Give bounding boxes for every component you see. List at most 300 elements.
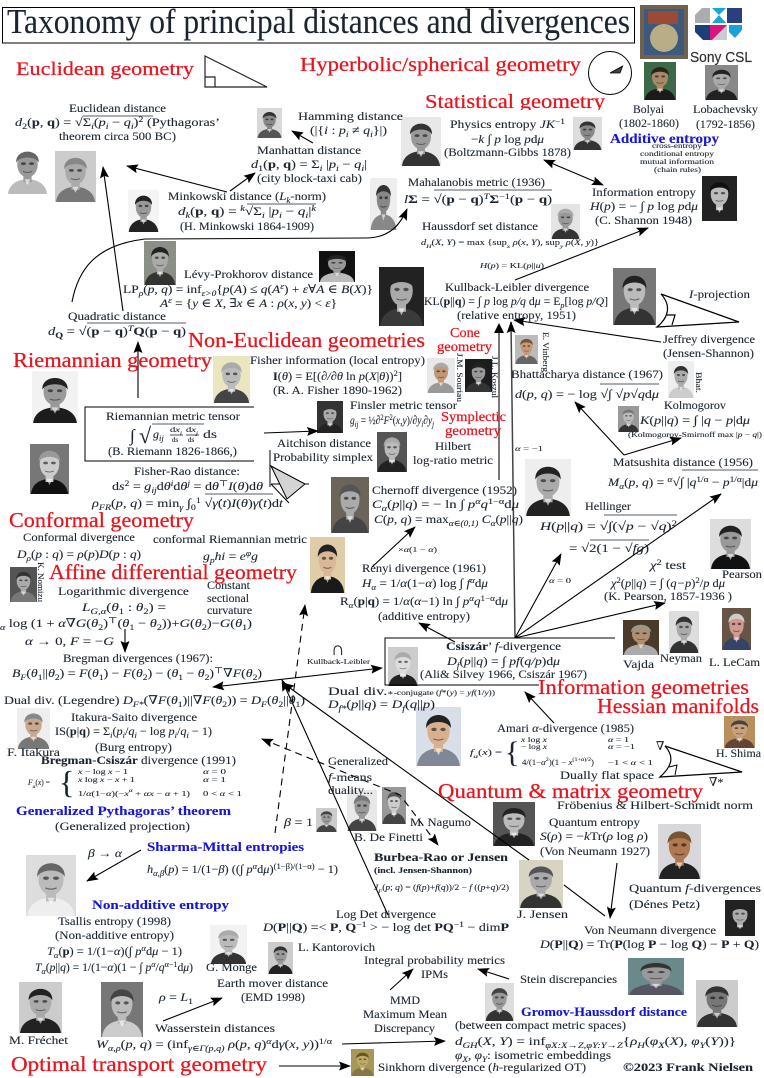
arrow: MMD to IPM — [390, 969, 413, 990]
text: L. LeCam: L. LeCam — [709, 655, 761, 669]
text: Jeffrey divergence — [663, 332, 755, 360]
text: Additive entropy notes: mutual information — [640, 158, 715, 166]
text: Minkowski distance: dk(p, q) = k√Σ i |pi − qi|k — [178, 204, 316, 220]
portrait: Finsler — [317, 401, 343, 433]
text: Log Det divergence: Log Det divergence — [336, 907, 436, 921]
text: rotated Bhat.: Bhat. — [694, 372, 703, 393]
icon: dually flat triangle — [656, 739, 742, 789]
heading: Cone geometry: Cone — [450, 326, 480, 341]
text: Fisher information: (R. A. Fisher 1890-1962) — [273, 383, 402, 397]
portrait: Villani — [101, 982, 143, 1037]
text: Integral probability metrics: Integral probability metrics — [364, 953, 505, 967]
text: L. Kantorovich: L. Kantorovich — [298, 940, 375, 954]
text: Jeffrey divergence: (Jensen-Shannon) — [663, 346, 754, 360]
text: Information entropy: (C. Shannon 1948) — [595, 213, 692, 227]
arrow: Log divergence to Bregman — [124, 629, 126, 652]
text: Bregman divergences: BF(θ1||θ2) = F(θ1) − F(θ2) − ( θ1 − θ2)⊤∇F(θ2) — [12, 666, 262, 682]
text: Fisher-Rao distance: ds2 = gijdθidθj = d θ⊤I(θ)dθ — [112, 479, 263, 494]
text: Burbea-Rao or Jensen: Burbea-Rao or Jensen — [374, 850, 508, 864]
text: Tsallis entropy: (Non-additive entropy) — [55, 928, 174, 942]
text: Riemannian metric tensor: ds — [172, 436, 178, 444]
text: Burbea-Rao or Jensen — [374, 850, 509, 894]
text: Conformal Riemannian metric: conformal Riemannian metric — [153, 532, 307, 546]
text: alpha minus one label: α = −1 — [515, 445, 544, 453]
text: Chernoff divergence: Chernoff divergence (1952) — [372, 483, 517, 497]
heading: Riemannian geometry: Riemannian geometry — [13, 348, 213, 372]
text: Riemannian metric tensor: gij — [153, 427, 164, 442]
portrait: LeCam — [722, 608, 751, 650]
text: chi-square test: (K. Pearson, 1857-1936 ) — [604, 589, 732, 603]
text: Finsler metric tensor: gij = ½∂2F2(x,y)/∂yi∂yj — [350, 413, 435, 428]
panel: Csiszar box — [385, 638, 615, 685]
icon: dually flat triangle: ∇* — [709, 775, 723, 789]
text: Fisher-Rao distance: Fisher-Rao distance: — [134, 464, 240, 478]
text: Bregman-Csiszar divergence: α = 0 — [203, 768, 227, 776]
portrait: Csiszar — [388, 647, 418, 686]
text: Minkowski distance: (H. Minkowski 1864-1909) — [180, 219, 314, 233]
text: Earth mover distance — [217, 976, 328, 1004]
text: Renyi divergence: Hα = 1/α(1−α) log ∫ fαdμ — [361, 576, 488, 592]
text: Fisher information: Fisher information (local entropy) — [250, 353, 425, 367]
portrait: Fisher — [213, 356, 250, 403]
text: Pearson name: Pearson — [722, 567, 762, 581]
text: Euclidean distance: theorem circa 500 BC) — [59, 129, 176, 143]
text: I-projection: I-projection — [688, 287, 750, 301]
arrow: Quadratic to Euclidean — [103, 167, 123, 311]
text: Logarithmic divergence: α → 0, F = − G — [25, 634, 114, 648]
portrait: Jensen — [519, 860, 563, 908]
text: Quantum entropy: Quantum entropy — [549, 815, 640, 829]
text: Bregman-Csiszar divergence: Bregman-Csiszár divergence (1991) — [41, 753, 236, 767]
text: Kullback-Leibler intersection: ∩ — [331, 639, 345, 660]
arrow: Manhattan to Hamming — [292, 131, 313, 143]
portrait: Chernoff — [331, 477, 369, 533]
text: Kullback-Leibler divergence: KL(p||q) = ∫ p log p/q dμ = Ep[log p/Q] — [424, 294, 608, 310]
text: Fisher-Rao distance: ρFR(p, q) = min γ ∫01 √γ̇(t)I(θ)γ̇(t)dt — [91, 496, 284, 512]
heading: Statistical geometry: Statistical geometry — [425, 91, 605, 113]
text: M. Nagumo: M. Nagumo — [410, 815, 471, 829]
text: Riemannian metric tensor: (B. Riemann 1826-1866,) — [108, 444, 237, 458]
icon: probability simplex — [270, 450, 309, 503]
text: Bregman-Csiszar divergence: α = 1 — [203, 776, 227, 784]
arrow: Csiszar to Renyi — [419, 623, 455, 642]
text: Burbea-Rao or Jensen: JF(p; q) = ( f(p)+f(q))/2 − f ((p+q)/2) — [374, 883, 509, 894]
text: Hellinger: H(p||q) = √∫(√ p − √ q)2 — [539, 519, 677, 533]
arrow: Csiszar to Hellinger — [515, 554, 561, 638]
text: Kullback-Leibler divergence: (relative entropy, 1951) — [457, 308, 576, 322]
portrait: Von Neumann small — [725, 900, 755, 936]
text: Constant sectional curvature: sectional — [207, 591, 250, 605]
heading: Information geometries: Information geometries — [538, 675, 749, 699]
text: Csiszar f-divergence: (Ali& Silvey 1966, Csiszár 1967) — [420, 667, 587, 681]
text: Itakura-Saito divergence: IS(p|q) = Σi(pi/qi − log pi/qi − 1) — [55, 724, 212, 740]
text: Minkowski distance: Minkowski distance ( Lk-norm) — [168, 189, 326, 204]
text: Gromov-Hausdorff details: (between compact metric spaces) — [455, 1018, 626, 1032]
heading: Additive entropy: Additive entropy — [610, 132, 719, 147]
portrait: Itakura — [17, 708, 50, 749]
text: Hellinger — [539, 499, 677, 555]
text: Additive entropy notes: (chain rules) — [654, 166, 702, 174]
heading: Affine differential geometry: Affine differential geometry — [49, 560, 298, 584]
arrow: Sharma-Mittal to Tsallis — [87, 850, 141, 881]
text: Tsallis entropy: Tsallis entropy (1998) — [58, 914, 171, 928]
portrait: Frechet — [19, 982, 62, 1033]
portrait: Prokhorov — [319, 251, 355, 282]
text: Amari alpha-divergence: 4/(1−α2)(1 − x(1+α)/2) — [522, 756, 594, 767]
heading: Generalized Pythagoras theorem: Generalized Pythagoras’ theorem — [16, 803, 231, 818]
text: Renyi divergence — [340, 561, 508, 623]
text: Quantum entropy — [540, 815, 650, 858]
text: Generalized f-means duality: Generalized — [328, 754, 388, 768]
text: Conformal divergence: Conformal divergence — [23, 530, 135, 544]
text: Bregman-Csiszar divergence: 1/ α (1− α )(− x α + αx − α + 1) — [78, 789, 191, 798]
panel: Riemannian box — [85, 407, 254, 461]
portrait: Leibler — [613, 268, 656, 325]
portrait: Mahalanobis — [370, 178, 397, 230]
text: Wasserstein distances: Wasserstein distances — [155, 1021, 275, 1035]
portrait: Koszul — [465, 359, 492, 392]
icon: illuminated manuscript — [640, 5, 688, 59]
text: Dual divergence conjugate: Df*(p||q) = Df(q||p) — [327, 697, 435, 712]
arrow: dashed beta to Renyi — [275, 605, 305, 833]
text: Fisher information: I(θ) = E[(∂/∂θ ln p(X|θ))2] — [273, 369, 402, 383]
icon: I-projection — [657, 294, 739, 327]
portrait: Shannon — [702, 176, 737, 221]
portrait: Sinkhorn — [351, 1049, 374, 1076]
text: Sharma-Mittal formula: hα,β(p) = 1/(1−β) ((∫ pαdμ)(1−β)/(1−α) − 1) — [147, 862, 338, 878]
portrait: Levy — [144, 241, 176, 285]
text: G. Monge: G. Monge — [206, 960, 257, 974]
text: Levy-Prokhorov distance — [123, 267, 373, 310]
text: Quantum f-divergences — [629, 881, 761, 911]
text: Gromov-Hausdorff details — [455, 1018, 736, 1064]
text: Fisher-Rao distance — [91, 464, 284, 512]
text: Amari alpha-divergence: { — [505, 736, 519, 769]
portrait: Hilbert — [377, 432, 407, 472]
text: Bolyai: Bolyai — [633, 102, 665, 116]
text: Bregman-Csiszar divergence: x − log x − 1 — [77, 768, 129, 776]
text: Mahalanobis metric: Mahalanobis metric (1936) — [408, 175, 545, 189]
text: Integral probability metrics: IPMs — [421, 967, 448, 981]
text: Amari alpha-divergence: Amari α-divergence (1985) — [497, 721, 634, 735]
text: Tsallis entropy: Tα(p) = 1/(1−α)(∫ pαdμ − 1) — [47, 944, 182, 960]
text: Kullback-Leibler divergence: Kullback-Leibler divergence — [445, 280, 589, 294]
portrait: Nomizu — [10, 567, 37, 602]
text: Burbea-Rao or Jensen: (incl. Jensen-Shannon) — [374, 866, 472, 875]
text: Additive entropy notes: conditional entropy — [640, 150, 715, 158]
heading: Sharma-Mittal entropies: Sharma-Mittal entropies — [147, 839, 304, 854]
portrait: Hausdorff — [551, 204, 580, 239]
text: Manhattan distance: Manhattan distance — [257, 143, 361, 157]
text: Generalized f-means duality — [328, 754, 388, 797]
text: Von Neumann divergence — [539, 923, 759, 951]
text: Kullback-Leibler intersection: Kullback-Leibler — [307, 658, 371, 666]
text: Riemannian metric tensor: Riemannian metric tensor — [106, 409, 240, 423]
arrow: Bregman and Csiszar intersection — [213, 668, 382, 687]
text: Bregman divergences: Bregman divergences (1967): — [63, 651, 213, 665]
text: MMD — [363, 993, 447, 1035]
portrait: Kantorovich — [268, 942, 293, 974]
text: Hilbert log-ratio metric — [413, 439, 493, 467]
arrow: Riemannian to Quadratic — [137, 342, 139, 398]
heading: Cone geometry — [437, 326, 492, 355]
text: Amari alpha-divergence: x log x — [520, 736, 548, 744]
text: MMD: Discrepancy — [374, 1021, 435, 1035]
heading: Non-Euclidean geometries: Non-Euclidean geometries — [188, 328, 425, 352]
text: Itakura-Saito divergence: Itakura-Saito divergence — [71, 710, 197, 724]
text: F. Itakura: F. Itakura — [7, 745, 61, 759]
text: Conformal Riemannian metric — [153, 532, 307, 564]
icon: hyperbolic disk — [588, 52, 632, 94]
text: Quantum entropy: (Von Neumann 1927) — [540, 844, 650, 858]
portrait: Petz — [658, 824, 701, 879]
text: Kolmogorov: Kolmogorov — [664, 398, 726, 412]
text: Amari alpha-divergence: fα(x) = — [470, 748, 503, 760]
text: Manhattan distance — [251, 143, 367, 185]
text: Amari alpha-divergence: − log x — [521, 743, 548, 751]
portrait: Kullback — [379, 267, 424, 326]
text: Amari alpha-divergence: −1 < α < 1 — [608, 759, 654, 767]
text: Bolyai: (1802-1860) — [619, 116, 679, 130]
text: Sinkhorn divergence: Sinkhorn divergence ( h-regularized OT) — [378, 1060, 586, 1074]
text: beta equals one: β = 1 — [283, 815, 313, 829]
portrait: Boltzmann — [401, 117, 441, 166]
arrow: Chernoff to KL (grey) — [494, 323, 504, 480]
portrait: Tsallis — [26, 855, 76, 916]
text: Itakura-Saito divergence — [55, 710, 212, 754]
text: Hilbert log-ratio metric: Hilbert — [435, 439, 472, 453]
portrait: Von Neumann large — [493, 802, 535, 846]
text: Physics entropy: Physics entropy JK−1 — [450, 117, 565, 131]
portrait: Neyman — [669, 611, 699, 653]
text: H. Shima: H. Shima — [716, 746, 762, 760]
text: Additive entropy notes — [640, 142, 715, 174]
text: Amari alpha-divergence — [470, 721, 654, 769]
text: M. Frechet: M. Fréchet — [9, 1033, 69, 1047]
text: Generalized f-means duality: f-means — [328, 770, 372, 784]
text: Jeffrey divergence: Jeffrey divergence — [663, 332, 755, 346]
heading: Optimal transport geometry: Optimal transport geometry — [11, 1052, 268, 1076]
arrow: Renyi to Chernoff — [372, 527, 415, 567]
heading: Symplectic geometry — [441, 410, 506, 439]
portrait: De Finetti B — [347, 790, 377, 831]
text: chi-square test — [604, 558, 732, 603]
text: Integral probability metrics — [364, 953, 505, 981]
arrow: Csiszar to KL — [511, 322, 515, 638]
text: Mahalanobis metric: lΣ = √( p − q)TΣ−1(p − q) — [404, 192, 552, 206]
text: Log Det divergence: D(P||Q) =< P, Q−1 > − log det PQ −1 − dim P — [262, 920, 509, 934]
text: chi-square test: χ2(p||q) = ∫ (q−p)2/p dμ — [610, 576, 725, 590]
text: Csiszar f-divergence: Df(p||q) = ∫ pf(q/p)dμ — [446, 654, 560, 670]
text: Von Neumann divergence: Von Neumann divergence — [584, 923, 716, 937]
text: Levy-Prokhorov distance: Aε = {y ∈ X, ∃x ∈ A : ρ(x, y) < ε} — [159, 296, 337, 310]
portrait: Gromov metric author — [696, 980, 738, 1027]
arrow: Csiszar to Matsushita — [515, 494, 721, 638]
arrow: Wasserstein to Gromov-Hausdorff — [342, 1041, 445, 1044]
text: Physics entropy: (Boltzmann-Gibbs 1878) — [444, 145, 571, 159]
portrait: Bolyai — [644, 62, 676, 100]
text: Bregman divergences — [12, 651, 262, 682]
portrait: Stein — [628, 958, 684, 995]
text: Amari alpha-divergence: α = 1 — [608, 736, 630, 744]
text: Amari alpha-divergence: α = −1 — [608, 743, 636, 751]
arrow: Matsushita to Kolmogorov — [624, 438, 681, 455]
portrait: Lobachevsky — [705, 65, 738, 100]
text: B. De Finetti: B. De Finetti — [354, 830, 424, 844]
arrow: Boltzmann and Information entropy — [544, 160, 603, 185]
text: Tsallis entropy: Tα(p||q) = 1/(1−α)(1 − ∫ pα/qα−1dμ) — [35, 960, 193, 976]
text: Euclidean distance — [15, 101, 220, 143]
text: Riemannian metric tensor: ds — [203, 427, 217, 441]
portrait: Vajda — [623, 620, 659, 655]
text: Aitchison distance: Probability simplex — [273, 450, 373, 464]
text: Aitchison distance: Aitchison distance — [277, 436, 371, 450]
text: Quadratic distance: dQ = √( p − q)TQ(p − q) — [48, 324, 186, 340]
text: Levy-Prokhorov distance: LPρ(p, q) = inf ε>0{p(A) ≤ q(Aε) + ε∀A ∈ B(X)} — [123, 282, 373, 298]
text: Euclidean distance: Euclidean distance — [69, 101, 166, 115]
text: Csiszar f-divergence: Csiszár ’ f-divergence — [446, 639, 561, 653]
portrait: Hamming — [257, 108, 282, 138]
arrow: Amari to Csiszar — [525, 692, 554, 723]
portrait: Monge — [210, 925, 247, 964]
arrow: Log Det to Bregman — [282, 680, 388, 915]
text: Bregman-Csiszar divergence: { — [59, 764, 74, 800]
arrow: Jensen to Bregman — [283, 683, 529, 860]
text: Frobenius norm: Fröbenius & Hilbert-Schmidt norm — [557, 798, 754, 812]
portrait: Pearson — [710, 519, 751, 569]
text: Logarithmic divergence: α log (1 + α∇G(θ2)⊤(θ1 − θ2))+G(θ2)−G(θ1) — [0, 616, 252, 632]
text: Information entropy: Information entropy — [592, 185, 696, 199]
text: Gromov-Hausdorff details: φX, φY: isometric embeddings — [455, 1048, 611, 1064]
text: Wasserstein distances — [96, 1021, 333, 1052]
text: Physics entropy — [444, 117, 571, 159]
text: Constant sectional curvature — [207, 578, 252, 617]
portrait: Kolmogorov — [618, 406, 639, 432]
text: Logarithmic divergence — [0, 584, 252, 648]
heading: Quantum and matrix geometry: Quantum & matrix geometry — [438, 779, 704, 803]
text: Aitchison distance — [273, 436, 373, 464]
heading: Symplectic geometry: geometry — [445, 424, 501, 439]
arrow: Wasserstein to EMD — [163, 998, 222, 1021]
text: Matsushita distance: Mα(p, q) = α√∫ |q1/α − p1/α|dμ — [607, 475, 758, 490]
text: Hamming distance — [298, 109, 403, 138]
text: Bregman-Csiszar divergence — [27, 753, 243, 800]
heading: Non-additive entropy: Non-additive entropy — [92, 897, 230, 912]
portrait: Amari — [416, 707, 461, 766]
text: Additive entropy notes: cross-entropy — [652, 142, 703, 150]
portrait: De Finetti A — [316, 808, 337, 832]
text: Chernoff divergence — [372, 483, 523, 528]
text: Conformal divergence: Dρ(p : q) = ρ(p)D(p : q) — [16, 547, 141, 562]
arrow: Riemannian to Finsler — [264, 431, 318, 433]
heading: Cone geometry: geometry — [437, 340, 492, 355]
arrow: KL to Shannon — [515, 228, 648, 280]
portrait: Minkowski — [128, 190, 159, 232]
text: Kolmogorov — [628, 398, 763, 439]
text: Bregman-Csiszar divergence: Fα(x) = — [27, 778, 50, 790]
text: Bhattacharya distance: d(p, q) = − log √∫ √ p√qdμ — [515, 387, 659, 401]
text: Stein discrepancies: Stein discrepancies — [520, 972, 617, 986]
text: Gromov-Hausdorff details: dGH (X, Y) = inf φX:X→Z,φY:Y→Z {ρH(φX(X), φY(Y))} — [455, 1034, 736, 1050]
text: Matsushita distance: Matsushita distance (1956) — [613, 455, 753, 469]
heading: Gromov-Haussdorf distance: Gromov-Haussdorf distance — [521, 1004, 687, 1019]
arrow: Csiszar to chi-square — [515, 603, 665, 638]
text: Hausdorff set distance: Haussdorf set distance — [422, 219, 538, 233]
arrow: Optimal transport to Sinkhorn — [279, 1065, 350, 1067]
text: Hilbert log-ratio metric: log-ratio metric — [413, 453, 493, 467]
text: Riemannian metric tensor — [106, 409, 240, 458]
text: rotated J.M. Souriau: J.M. Souriau — [455, 353, 464, 402]
logo: Sony CSL — [690, 8, 752, 66]
text: Logarithmic divergence: LG,α (θ1 : θ2) = — [81, 600, 166, 616]
text: Kullback-Leibler intersection — [307, 639, 371, 666]
text: MMD: Maximum Mean — [363, 1007, 447, 1021]
portrait: Euclid — [55, 151, 96, 202]
portrait: Rao — [30, 444, 69, 494]
text: Mahalanobis metric — [404, 175, 552, 206]
text: Levy-Prokhorov distance: Lévy-Prokhorov distance — [184, 267, 313, 281]
text: Log Det divergence — [262, 907, 509, 934]
text: Bregman-Csiszar divergence: 0 < α < 1 — [203, 790, 243, 798]
text: Bhattacharya distance: Bhattacharya distance (1967) — [511, 367, 663, 381]
text: Quantum f-divergences: Quantum f-divergences — [629, 881, 761, 895]
text: Euclidean distance: d2(p, q) = √Σ i(pi − qi)2 (Pythagoras’ — [15, 115, 220, 130]
portrait: Gromov — [485, 983, 514, 1021]
text: alpha zero label: α = 0 — [549, 577, 572, 585]
text: Renyi divergence: Rα(p|q) = 1/α(α−1) ln ∫ pαq1−αdμ — [340, 594, 508, 610]
arrow: Jensen to Von Neumann — [564, 885, 605, 916]
text: Wasserstein distances: Wα,ρ(p, q) = (inf γ∈Γ(p,q) ρ(p, q)αdγ(x, y))1/α — [96, 1037, 333, 1052]
text: Quadratic distance — [48, 309, 186, 340]
logo: Sony CSL: Sony CSL — [690, 49, 752, 66]
text: Quadratic distance: Quadratic distance — [68, 309, 166, 323]
arrow: Minkowski to Euclidean — [127, 166, 227, 192]
text: Tsallis entropy — [35, 914, 193, 976]
portrait: Shima — [724, 716, 755, 748]
text: Generalized projection: (Generalized projection) — [55, 819, 190, 833]
text: Riemannian metric tensor: ds — [188, 436, 194, 444]
text: Finsler metric tensor: Finsler metric tensor — [350, 398, 457, 412]
portrait: Vinberg — [515, 335, 538, 364]
text: Earth mover distance: (EMD 1998) — [241, 990, 305, 1004]
text: Bregman-Csiszar divergence: x log x − x + 1 — [77, 776, 136, 784]
portrait: Riemann — [32, 371, 78, 423]
text: Lobachevsky: (1792-1856) — [696, 117, 755, 131]
text: Chernoff divergence: C(p, q) = max α∈(0,1) Cα(p||q) — [374, 512, 523, 528]
text: Logarithmic divergence: Logarithmic divergence — [58, 584, 189, 598]
text: Generalized f-means duality: duality... — [328, 783, 373, 797]
portrait: Pythagoras — [7, 145, 48, 194]
text: Earth mover distance: Earth mover distance — [217, 976, 328, 990]
heading: Hyperbolic/spherical geometry: Hyperbolic/spherical geometry — [300, 54, 581, 76]
text: Quantum f-divergences: (Dénes Petz) — [629, 897, 700, 911]
heading: Euclidean geometry: Euclidean geometry — [16, 59, 195, 80]
text: Renyi divergence: Rényi divergence (1961) — [362, 561, 486, 575]
text: Physics entropy: −k ∫ p log pdμ — [471, 132, 544, 146]
text: Information entropy: H(p) = − ∫ p log pdμ — [589, 199, 698, 213]
text: Riemannian metric tensor: d x i — [170, 426, 183, 436]
text: Finsler metric tensor — [350, 398, 457, 428]
text: Constant sectional curvature: Constant — [207, 578, 251, 592]
text: Bolyai — [619, 102, 679, 130]
text: Minkowski distance — [168, 189, 326, 233]
text: Dually flat space: Dually flat space — [560, 768, 654, 782]
text: Hellinger: Hellinger — [585, 499, 631, 513]
text: Conformal divergence — [16, 530, 141, 562]
text: rho equals L1: ρ = L1 — [158, 990, 193, 1006]
text: Bhattacharya distance — [511, 367, 663, 401]
text: H equals KL label: H (p) = KL( p||u) — [479, 262, 545, 270]
